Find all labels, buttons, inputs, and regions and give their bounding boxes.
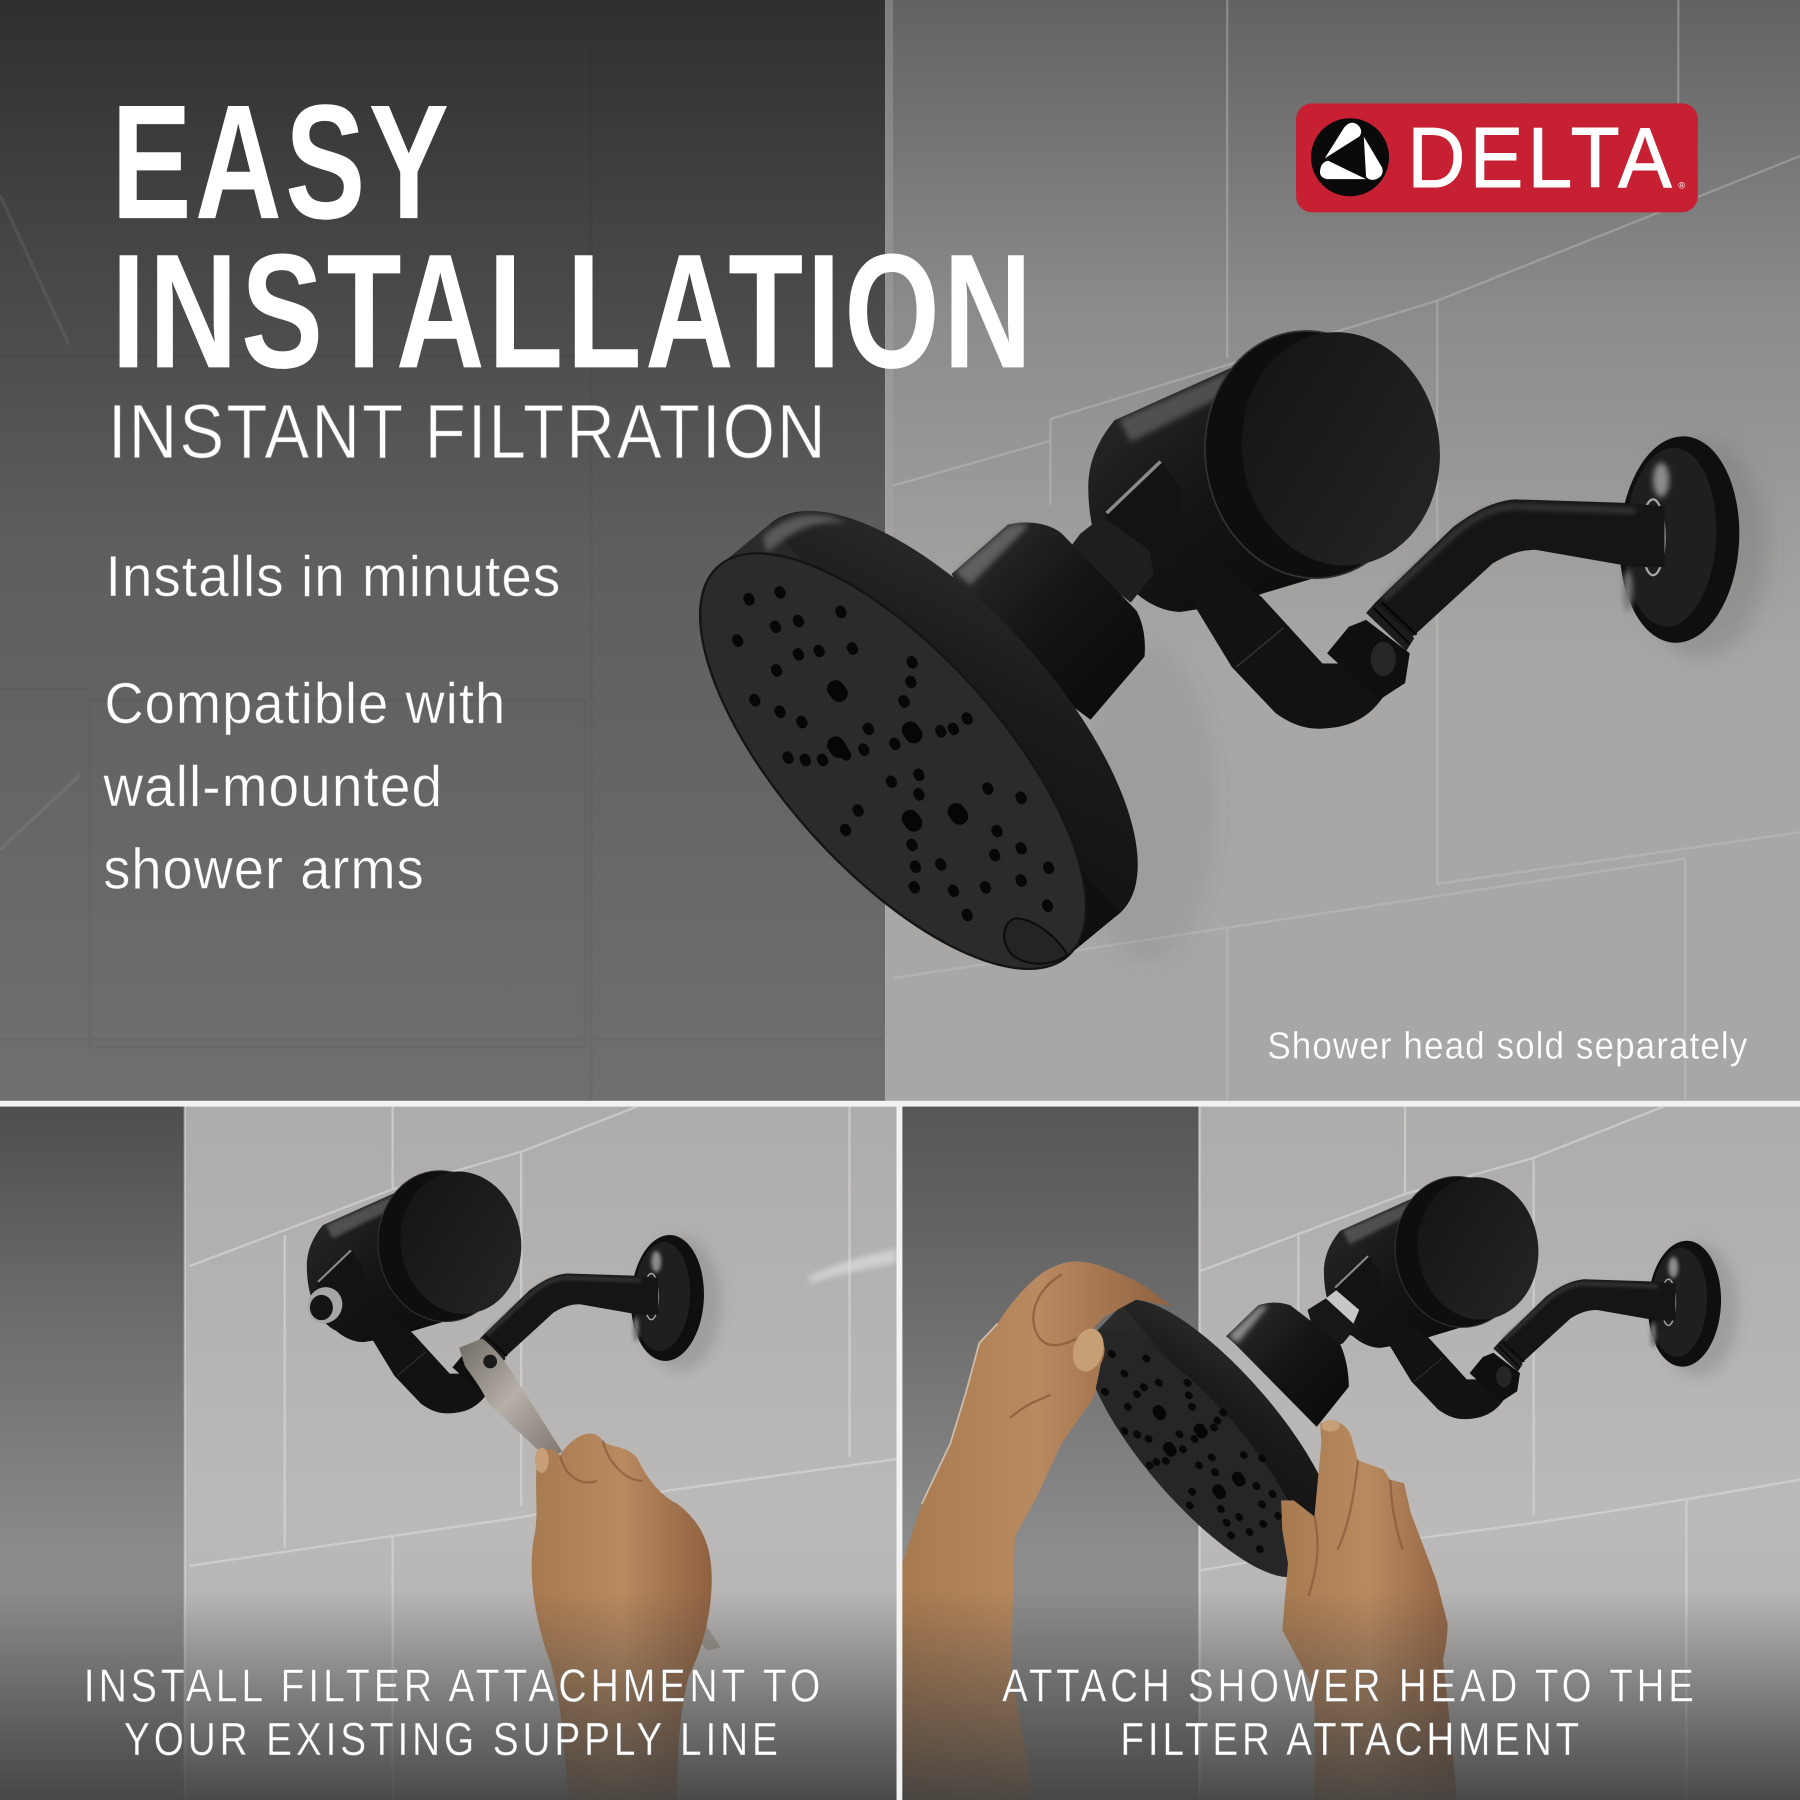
panel divider (0, 1101, 1800, 1800)
shower head (1056, 1272, 1365, 1605)
dark blurred tile background (0, 0, 885, 1101)
right hand (1281, 1420, 1457, 1800)
logo: delta: DELTA (1407, 110, 1676, 205)
spray nozzles (737, 591, 1049, 916)
logo: delta (1296, 103, 1698, 212)
panel: step 2 attach shower head (902, 1107, 1800, 1800)
caption: step 2: FILTER ATTACHMENT (1120, 1713, 1583, 1765)
threaded outlet (301, 1263, 356, 1330)
filter attachment on arm (1324, 1168, 1738, 1419)
text block: benefits: wall-mounted (102, 755, 443, 819)
panel: top hero photo (0, 0, 1800, 1148)
note: sold separately: Shower head sold separately (1267, 1025, 1748, 1067)
caption: step 2 (1002, 1659, 1698, 1765)
text block: benefits: Installs in minutes (106, 545, 561, 609)
logo: delta: ® (1678, 180, 1685, 190)
caption: step 1: INSTALL FILTER ATTACHMENT TO (84, 1659, 824, 1711)
heading: easy installation: EASY (111, 70, 452, 253)
text block: benefits (102, 545, 561, 902)
hand (532, 1433, 712, 1800)
left hand (902, 1261, 1172, 1800)
wrench (459, 1339, 721, 1651)
caption fade overlay (0, 1590, 1800, 1800)
caption: step 1: YOUR EXISTING SUPPLY LINE (124, 1713, 782, 1765)
photo: arm, elbow and filter attachment (1088, 317, 1768, 729)
panel: step 1 install filter attachment (0, 1107, 897, 1800)
text block: benefits: Compatible with (104, 672, 506, 736)
caption: step 1 (84, 1659, 824, 1765)
subheading: instant filtration: INSTANT FILTRATION (108, 389, 828, 475)
photo: shower head (637, 451, 1201, 1029)
heading: easy installation: INSTALLATION (111, 219, 1035, 402)
heading: easy installation (111, 70, 1035, 402)
spray face (637, 494, 1149, 1029)
filter attachment on arm (307, 1162, 721, 1413)
text block: benefits: shower arms (103, 838, 425, 902)
tile wall (885, 0, 1800, 1101)
